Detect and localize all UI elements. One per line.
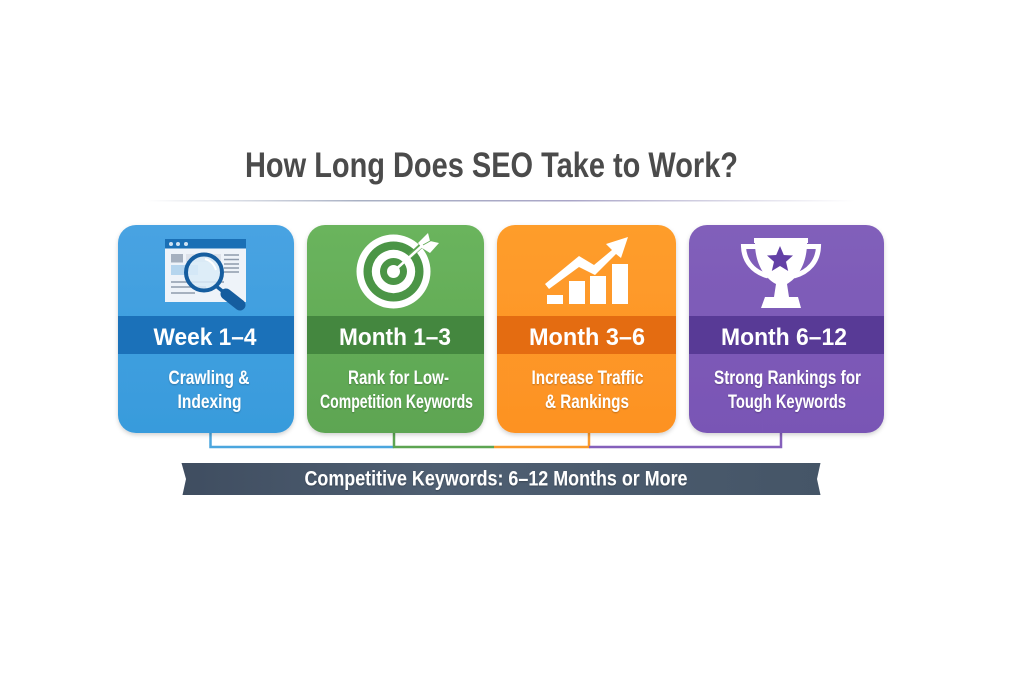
label: month 6-12: Month 6–12 bbox=[721, 324, 847, 351]
description: increase traffic and rankings: & Rankings bbox=[545, 392, 629, 413]
description: rank for low-competition keywords: Competition Keywords bbox=[320, 392, 473, 413]
description: increase traffic and rankings bbox=[532, 368, 644, 413]
panel: month 3-6 bbox=[497, 225, 676, 433]
icon: browser with magnifying glass bbox=[165, 239, 246, 305]
label: month 3-6: Month 3–6 bbox=[529, 324, 645, 351]
description: strong rankings for tough keywords: Strong Rankings for bbox=[714, 368, 861, 389]
description: increase traffic and rankings: Increase Traffic bbox=[532, 368, 644, 389]
label: week 1-4: Week 1–4 bbox=[154, 324, 257, 351]
icon: rising bar chart bbox=[545, 237, 628, 304]
description: rank for low-competition keywords: Rank for Low- bbox=[348, 368, 449, 389]
panel: month 6-12 bbox=[689, 225, 884, 433]
description: crawling and indexing: Indexing bbox=[178, 392, 242, 413]
description: crawling and indexing bbox=[168, 368, 250, 413]
panel: week 1-4 bbox=[118, 225, 294, 433]
label: month 1-3: Month 1–3 bbox=[339, 324, 451, 351]
description: strong rankings for tough keywords: Tough Keywords bbox=[728, 392, 846, 413]
panel: month 1-3 bbox=[307, 225, 484, 433]
banner text: Competitive Keywords: 6–12 Months or More bbox=[304, 468, 688, 490]
ribbon banner bbox=[182, 463, 820, 495]
description: crawling and indexing: Crawling & bbox=[168, 368, 250, 389]
icon: trophy with star bbox=[744, 238, 818, 308]
description: rank for low-competition keywords bbox=[320, 368, 473, 413]
icon: target with arrow bbox=[356, 233, 439, 308]
title: How Long Does SEO Take to Work? bbox=[245, 146, 738, 185]
description: strong rankings for tough keywords bbox=[714, 368, 861, 413]
connector lines bbox=[210, 433, 781, 447]
